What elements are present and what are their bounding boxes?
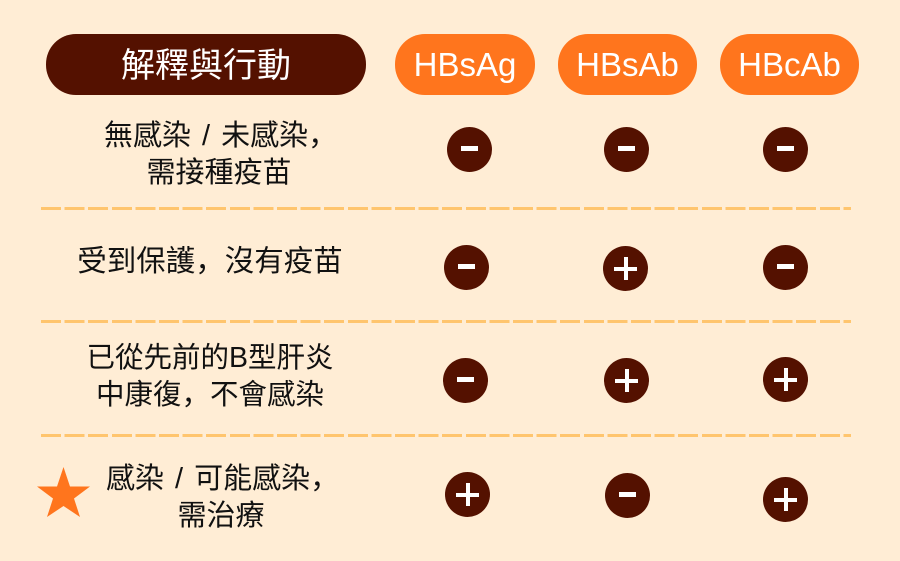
header: HBcAb: HBcAb	[738, 46, 841, 83]
header: HBsAb: HBsAb	[576, 46, 679, 83]
row 1 text: 需接種疫苗	[146, 157, 292, 189]
row 2 HBsAb positive	[603, 246, 648, 291]
row 3 text	[86, 342, 334, 411]
header: HBcAb	[720, 34, 859, 95]
row 2 HBsAg negative	[444, 245, 489, 290]
row 3 HBcAb positive	[763, 357, 808, 402]
row 4 text: 感染 / 可能感染，	[106, 463, 339, 495]
row 3 text: 中康復，不會感染	[96, 379, 324, 411]
row 1 text: 無感染 / 未感染，	[104, 120, 337, 152]
row 1 text	[104, 120, 337, 189]
row 3 HBsAg negative	[443, 358, 488, 403]
row 3 HBsAb positive	[604, 358, 649, 403]
header: HBsAb	[558, 34, 697, 95]
row 4 HBsAb negative	[605, 473, 650, 518]
header: HBsAg	[395, 34, 535, 95]
row 1 HBsAb negative	[604, 127, 649, 172]
icon: star	[37, 467, 90, 517]
row 4 text: 需治療	[177, 500, 264, 532]
row 1 HBcAb negative	[763, 127, 808, 172]
header: 解釋與行動	[46, 34, 366, 95]
header: HBsAg: HBsAg	[414, 46, 516, 83]
row 2 text: 受到保護，沒有疫苗	[77, 245, 343, 278]
row 3 text: 已從先前的B型肝炎	[86, 342, 334, 374]
row 2 HBcAb negative	[763, 245, 808, 290]
header: 解釋與行動: 解釋與行動	[121, 47, 291, 85]
row 4 HBsAg positive	[445, 472, 490, 517]
row 1 HBsAg negative	[447, 127, 492, 172]
row 4 HBcAb positive	[763, 477, 808, 522]
row 4 text	[106, 463, 339, 532]
